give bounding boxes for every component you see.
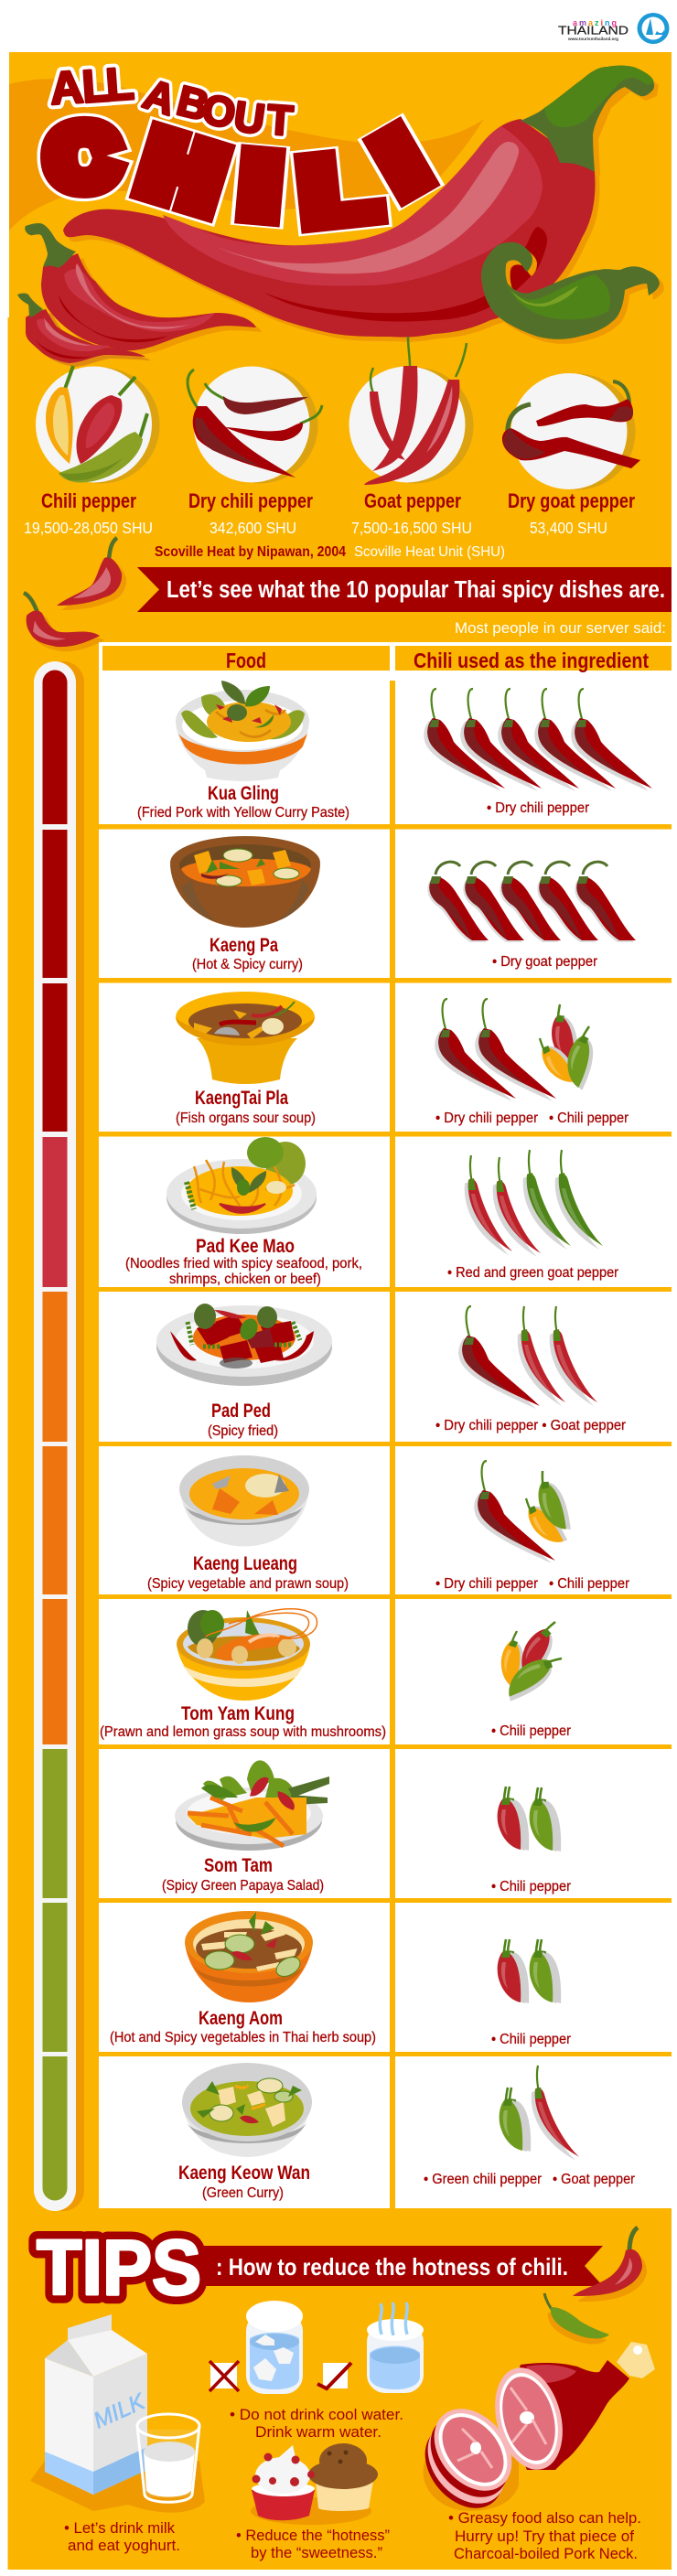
title line: CHILI: I [220, 122, 300, 250]
tip: greasy food: • Greasy food also can help. [448, 2509, 641, 2527]
row 3 dish: KaengTai Pla [176, 992, 315, 1084]
row 9 name: Kaeng Aom [199, 2008, 283, 2029]
chili type: goat pepper [349, 337, 474, 485]
row 9 dish: Kaeng Aom [185, 1911, 313, 2002]
banner: 10 popular dishes [137, 567, 672, 612]
row 5 name [208, 1401, 278, 1439]
row 4 description: (Noodles fried with spicy seafood, pork, [125, 1256, 362, 1272]
logo: tourism authority seal [637, 13, 670, 44]
hero: small red chili left [17, 293, 151, 367]
row 7 ingredient: • Chili pepper [491, 1723, 571, 1739]
tip: sweetness: by the “sweetness.” [251, 2544, 382, 2561]
title line: ALL: ALL [48, 58, 135, 114]
row 5 chilies [458, 1306, 597, 1409]
row 6 description: (Spicy vegetable and prawn soup) [147, 1576, 349, 1592]
row 1 dish: Kua Gling [176, 681, 309, 781]
tip: milk: and eat yoghurt. [68, 2537, 180, 2554]
row 6 ingredients [435, 1576, 629, 1592]
row 6 chilies [474, 1461, 571, 1563]
row 3 ingredients: • Dry chili pepper [435, 1111, 538, 1126]
tips heading: TIPS [37, 2225, 201, 2312]
tip: greasy food [448, 2509, 641, 2562]
tip: water [230, 2406, 403, 2441]
row 10 description: (Green Curry) [202, 2185, 284, 2201]
row 6 name [147, 1553, 349, 1592]
row 10 ingredients: • Goat pepper [553, 2172, 635, 2187]
title line: CHILI: H [134, 115, 231, 228]
row 2 ingredient: • Dry goat pepper [492, 954, 597, 970]
decorative swoosh [9, 79, 484, 231]
row 5 name: Pad Ped [211, 1401, 271, 1422]
icon: side chili lower [24, 593, 104, 651]
row 4 ingredient: • Red and green goat pepper [447, 1265, 618, 1281]
logo: amazing thailand: www.tourismthailand.org [567, 37, 618, 41]
tip: water: Drink warm water. [255, 2423, 381, 2441]
row 3 description: (Fish organs sour soup) [176, 1111, 316, 1126]
row 7 name [100, 1703, 386, 1740]
logo: amazing thailand [558, 18, 629, 41]
tip: milk: • Let’s drink milk [64, 2519, 175, 2537]
row 3 name: KaengTai Pla [195, 1088, 288, 1109]
row 8 chilies [498, 1787, 561, 1852]
server note: Most people in our server said: [455, 619, 666, 637]
title line: CHILI: C [47, 109, 118, 206]
row 10 ingredients [424, 2172, 635, 2187]
row 4 name: Pad Kee Mao [196, 1236, 295, 1257]
row 6 name: Kaeng Lueang [193, 1553, 297, 1574]
title line: CHILI: L [296, 134, 381, 244]
logo: amazing thailand: amazing [573, 18, 617, 27]
row 4 chilies [465, 1150, 603, 1257]
row 10 dish: Kaeng Keow Wan [182, 2063, 312, 2157]
row 8 ingredient: • Chili pepper [491, 1879, 571, 1894]
value: dry goat pepper SHU: 53,400 SHU [530, 519, 607, 537]
row 10 name: Kaeng Keow Wan [178, 2163, 310, 2184]
row 1 name: Kua Gling [208, 783, 279, 804]
title: All About Chili [47, 58, 461, 250]
title line: ABOUT: ABOUT [138, 70, 295, 145]
header: Food: Food [226, 649, 266, 672]
icon: tips red chili [573, 2227, 647, 2302]
row 8 description: (Spicy Green Papaya Salad) [162, 1878, 324, 1894]
row 7 dish: Tom Yam Kung [177, 1609, 317, 1701]
row 4 name: shrimps, chicken or beef) [169, 1272, 321, 1287]
row 10 ingredients: • Green chili pepper [424, 2172, 542, 2187]
row 2 dish: Kaeng Pa [170, 836, 320, 928]
row 1 name [137, 783, 349, 821]
row 8 dish: Som Tam [175, 1760, 329, 1851]
tip: sweetness: • Reduce the “hotness” [236, 2527, 390, 2544]
row 8 name: Som Tam [204, 1855, 273, 1876]
logo: amazing thailand: THAILAND [558, 24, 629, 37]
row 3 chilies [435, 999, 607, 1101]
icon: pork neck [409, 2342, 655, 2523]
row 4 dish: Pad Kee Mao [167, 1137, 317, 1234]
title line: CHILI: C [47, 109, 118, 206]
icon: check and warm water glass [317, 2302, 424, 2393]
icon: cross and cold water glass [210, 2301, 303, 2394]
icon: milk carton and glass [30, 2314, 205, 2513]
title line: CHILI: L [296, 134, 381, 244]
chili type: dry chili pepper [188, 366, 322, 483]
row 2 description: (Hot & Spicy curry) [192, 957, 303, 972]
icon: tips green chili [544, 2293, 609, 2344]
tip: water: • Do not drink cool water. [230, 2406, 403, 2423]
row 7 chilies [494, 1616, 570, 1701]
hero: green chili right [481, 242, 664, 344]
title line: CHILI: I [220, 122, 300, 250]
ham slices [409, 2394, 528, 2523]
glass of milk [137, 2414, 199, 2502]
tips ribbon [188, 2246, 603, 2286]
row 10 name [178, 2163, 310, 2201]
row 3 name [176, 1088, 316, 1126]
row 8 name [162, 1855, 324, 1894]
row 2 name: Kaeng Pa [210, 935, 278, 956]
label: Goat pepper: Goat pepper [364, 489, 461, 512]
tip: milk [64, 2519, 180, 2554]
icon: cupcake and muffin [251, 2443, 378, 2525]
row 6 ingredients: • Chili pepper [549, 1576, 629, 1592]
value: chili pepper SHU: 19,500-28,050 SHU [24, 519, 153, 537]
row 6 ingredients: • Dry chili pepper [435, 1576, 538, 1592]
row 9 description: (Hot and Spicy vegetables in Thai herb soup) [110, 2030, 376, 2045]
icon: milk carton and glass: MILK [90, 2388, 150, 2433]
row 1 ingredient: • Dry chili pepper [487, 800, 589, 816]
tip: greasy food: Hurry up! Try that piece of [455, 2528, 634, 2545]
row 2 name [192, 935, 303, 972]
chili type: dry goat pepper [502, 373, 640, 490]
label: Chili pepper: Chili pepper [41, 489, 136, 512]
label: Dry chili pepper: Dry chili pepper [188, 489, 313, 512]
row 9 chilies [498, 1939, 561, 2003]
row 1 description: (Fried Pork with Yellow Curry Paste) [137, 805, 349, 821]
hero: big red chili [63, 66, 659, 342]
heat thermometer [34, 661, 84, 2211]
row 7 description: (Prawn and lemon grass soup with mushrooms) [100, 1724, 386, 1740]
table background [99, 642, 672, 2208]
row 5 dish: Pad Ped [156, 1304, 332, 1386]
tips ribbon: : How to reduce the hotness of chili. [216, 2253, 568, 2281]
row 2 chilies: dry goat x5 [427, 862, 636, 942]
row 7 name: Tom Yam Kung [181, 1703, 295, 1724]
title line: ABOUT: ABOUT [138, 70, 295, 145]
row 3 ingredients: • Chili pepper [549, 1111, 629, 1126]
row 9 name [110, 2008, 376, 2045]
source note: Scoville Heat by Nipawan, 2004 [155, 544, 346, 560]
title line: CHILI [47, 92, 461, 250]
row 9 ingredient: • Chili pepper [491, 2032, 571, 2047]
hero: medium red chili left [25, 223, 262, 355]
tips heading: TIPS [37, 2225, 201, 2312]
row 1 chilies: dry chili x5 [424, 689, 652, 791]
tip: greasy food: Charcoal-boiled Pork Neck. [454, 2545, 638, 2562]
row 6 dish: Kaeng Lueang [179, 1455, 309, 1546]
row 10 chilies [500, 2066, 579, 2161]
chili type: chili pepper [36, 366, 159, 483]
row 5 ingredients: • Dry chili pepper • Goat pepper [435, 1418, 626, 1433]
title line: CHILI: H [134, 115, 231, 228]
unit note: Scoville Heat Unit (SHU) [354, 544, 505, 560]
icon: side chili upper [57, 538, 126, 610]
row 4 name [125, 1236, 362, 1287]
title line: CHILI: I [341, 92, 461, 232]
tip: sweetness [236, 2527, 390, 2561]
title line: CHILI: I [341, 92, 461, 232]
label: Dry goat pepper: Dry goat pepper [508, 489, 635, 512]
value: goat pepper SHU: 7,500-16,500 SHU [351, 519, 472, 537]
row 3 ingredients [435, 1111, 629, 1126]
value: dry chili pepper SHU: 342,600 SHU [210, 519, 296, 537]
row 5 description: (Spicy fried) [208, 1423, 278, 1439]
title line: ALL: ALL [48, 58, 135, 114]
